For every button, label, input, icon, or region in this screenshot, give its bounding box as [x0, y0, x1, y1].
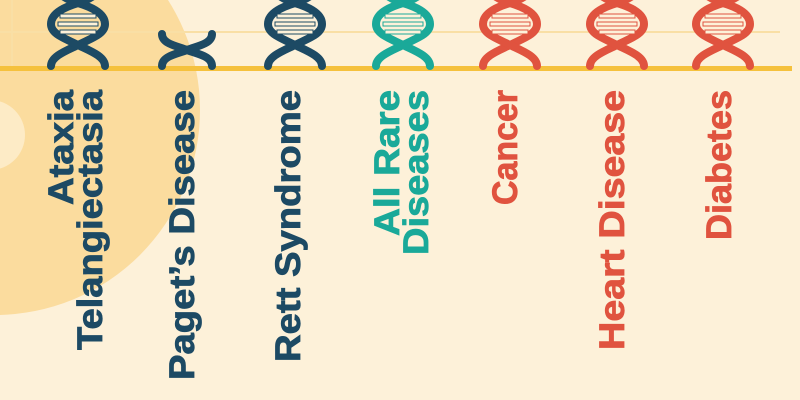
label: All Rare Diseases: Diseases [397, 90, 436, 255]
icon: DNA Ataxia [51, 0, 105, 66]
icon: DNA Rett [268, 0, 322, 66]
label: Heart Disease: Heart Disease [593, 90, 632, 350]
icon: DNA Cancer [483, 0, 537, 66]
label: Rett Syndrome: Rett Syndrome [269, 90, 308, 362]
icon: DNA Rare [376, 0, 430, 66]
icon: DNA Paget's [162, 34, 212, 66]
label: Cancer: Cancer [486, 90, 525, 205]
label: Paget's Disease: Paget’s Disease [163, 90, 202, 380]
label: Ataxia Telangiectasia [42, 89, 110, 350]
labels [42, 89, 739, 380]
label: All Rare Diseases [368, 90, 436, 255]
label: Ataxia Telangiectasia: Telangiectasia [71, 89, 110, 350]
icon: DNA Diabetes [696, 0, 750, 66]
axis line [0, 66, 792, 71]
label: Ataxia Telangiectasia: Ataxia [42, 89, 81, 205]
label: All Rare Diseases: All Rare [368, 90, 407, 236]
label: Diabetes: Diabetes [700, 90, 739, 240]
icon: DNA Heart [590, 0, 644, 66]
